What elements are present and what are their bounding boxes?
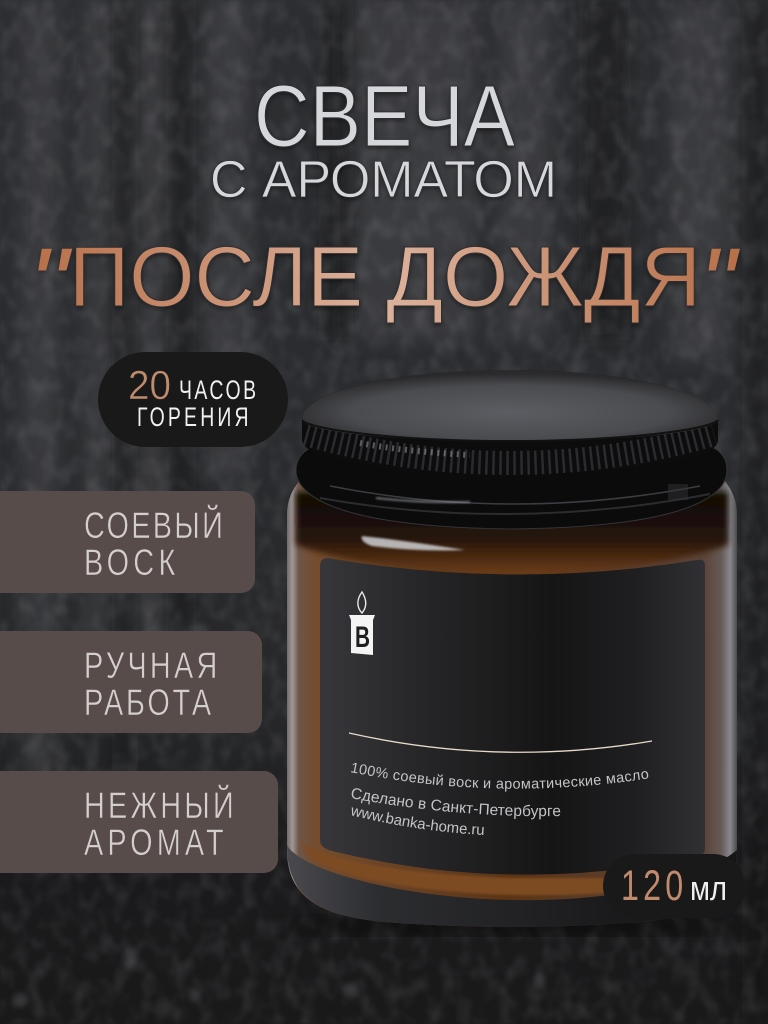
label text: made in: Сделано в Санкт-Петербурге xyxy=(352,788,560,820)
subtitle: С АРОМАТОМ: С АРОМАТОМ xyxy=(210,151,557,209)
panel: gentle scent: НЕЖНЫЙ xyxy=(84,785,234,827)
panel: soy wax: ВОСК xyxy=(84,543,176,584)
badge: 20 hours of burning: 20 xyxy=(128,362,171,408)
panel: soy wax: СОЕВЫЙ xyxy=(84,505,223,547)
icon: candle logo xyxy=(349,592,375,655)
badge: 20 hours of burning: ГОРЕНИЯ xyxy=(137,402,249,432)
jar collar xyxy=(296,448,727,529)
panel: gentle scent: АРОМАТ xyxy=(84,823,224,864)
label divider line xyxy=(349,733,652,752)
panel: gentle scent xyxy=(0,771,278,873)
panel: handmade xyxy=(0,631,262,733)
scent name: После дождя: " xyxy=(699,228,741,340)
jar body: amber glass xyxy=(287,480,737,935)
panel: handmade: РАБОТА xyxy=(84,683,212,724)
label: black sticker xyxy=(320,558,705,875)
badge: 20 hours of burning xyxy=(98,352,288,447)
scent name: После дождя: ПОСЛЕ ДОЖДЯ xyxy=(69,230,701,325)
jar lid xyxy=(302,370,718,474)
badge: 120 ml: 120 xyxy=(621,863,683,910)
glass base xyxy=(287,845,737,927)
label text: website: www.banka-home.ru xyxy=(352,807,484,835)
badge: 20 hours of burning: ЧАСОВ xyxy=(179,375,256,405)
lid ribs xyxy=(306,434,714,463)
badge: 120 ml xyxy=(603,854,745,918)
icon: candle logo: B xyxy=(355,621,370,654)
badge: 120 ml: мл xyxy=(690,870,727,908)
panel: handmade: РУЧНАЯ xyxy=(84,646,217,687)
title: СВЕЧА: СВЕЧА xyxy=(254,68,515,165)
candle jar xyxy=(287,370,737,937)
glass highlight xyxy=(362,536,465,550)
label text: ingredients: 100% соевый воск и ароматические масло xyxy=(351,762,648,792)
panel: soy wax xyxy=(0,491,255,593)
amber band xyxy=(300,842,620,895)
lid top xyxy=(302,370,718,441)
scent name: После дождя: " xyxy=(28,228,73,340)
